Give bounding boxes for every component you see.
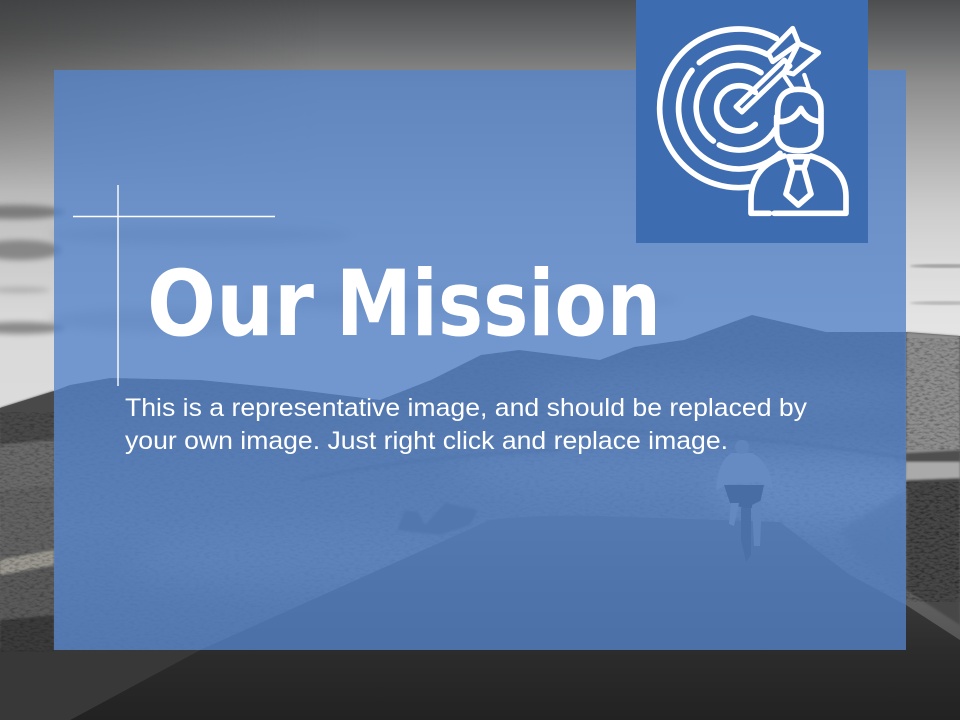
icon: target and businessman (660, 28, 846, 213)
title: Mission (336, 252, 661, 357)
body text: your own image. Just right click and replace image. (125, 427, 728, 455)
bank textures (906, 338, 960, 450)
icon: person head (777, 75, 821, 151)
body text (125, 394, 808, 455)
icon: target rings (660, 29, 780, 188)
icon: arrow (736, 28, 819, 112)
title (147, 252, 661, 357)
cyclist (716, 440, 773, 562)
crosshair decorative lines (73, 185, 275, 386)
body text: This is a representative image, and should be replaced by (125, 394, 808, 422)
rocks (397, 503, 478, 535)
light slopes (673, 26, 907, 514)
right bank bands (906, 332, 960, 625)
right roadside rocks (840, 490, 906, 590)
panel: translucent blue overlay (54, 70, 906, 650)
icon: person body and tie (751, 156, 846, 213)
left bank bands (0, 391, 54, 652)
hills and land (0, 315, 960, 720)
sky with clouds (0, 0, 960, 420)
road (70, 516, 960, 720)
land texture (787, 474, 872, 504)
dark ridge streaks (300, 430, 906, 480)
title: Our (147, 252, 314, 357)
panel: icon tile (636, 0, 868, 243)
lower left land below panel (0, 650, 200, 720)
